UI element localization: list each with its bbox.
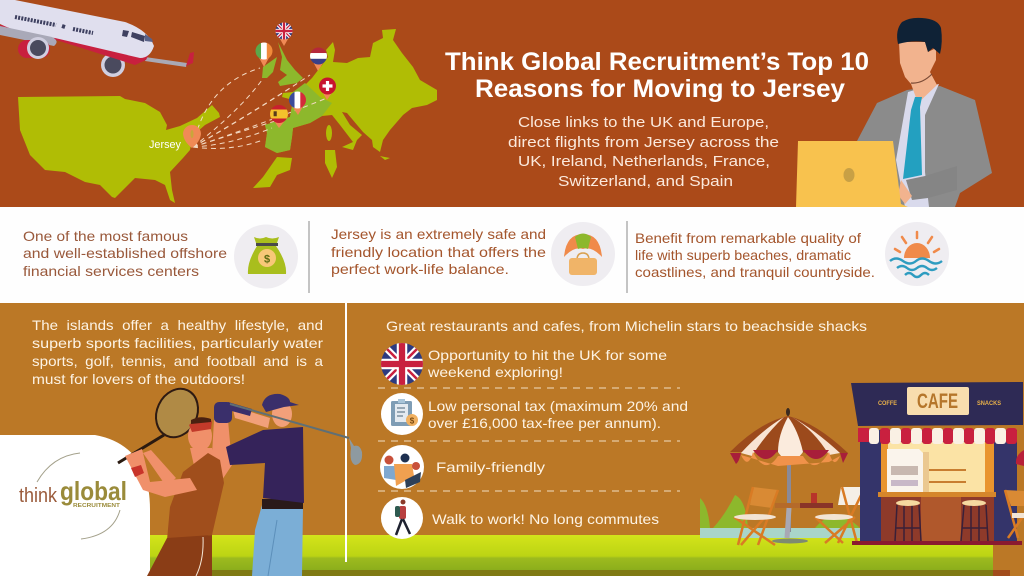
icon: family (380, 445, 424, 489)
icon: parasol and suitcase (551, 222, 615, 286)
illustration: far right chair (1005, 450, 1024, 538)
illustration: plane (0, 0, 194, 77)
panel: lower section background (0, 303, 1024, 576)
illustration: businessman with laptop (796, 18, 992, 207)
icon: sun over waves (885, 222, 949, 286)
pin: UK flag (276, 22, 292, 46)
text: flights intro: Switzerland, and Spain (558, 173, 733, 190)
icon: money bag (234, 224, 298, 288)
icon: money bag: $ (264, 254, 270, 266)
icon: tax document: $ (410, 416, 415, 426)
illustration: tennis player (118, 382, 232, 576)
text: quality of life (635, 230, 875, 280)
title: Think Global Recruitment’s Top 10 (445, 48, 869, 76)
map: USA (18, 96, 220, 203)
list item: UK weekend (381, 343, 667, 385)
pin: Spain flag (270, 105, 288, 128)
pin: France flag (289, 92, 306, 115)
illustration: right chair (815, 487, 865, 543)
text: flights intro: UK, Ireland, Netherlands, France, (518, 153, 770, 170)
pin: Switzerland flag (319, 78, 336, 100)
vertical divider: lower section (345, 303, 347, 562)
logo panel: think global recruitment (0, 435, 150, 576)
title: Reasons for Moving to Jersey (475, 75, 845, 103)
text: sports lifestyle: must for lovers of the outdoors! (32, 371, 245, 387)
panel: white benefits band background (0, 207, 1024, 303)
illustration: cafe kiosk: COFFE (878, 400, 898, 407)
illustration: cafe kiosk: SNACKS (977, 400, 1002, 407)
text: safe and friendly: perfect work-life balance. (331, 261, 509, 277)
pin: Jersey (183, 125, 201, 148)
logo panel: think global recruitment: RECRUITMENT (73, 503, 120, 509)
divider (626, 221, 628, 293)
text: financial services: and well-established offshore (23, 245, 227, 261)
text: financial services (23, 228, 227, 279)
pin: Netherlands flag (310, 48, 327, 71)
text: financial services: One of the most famous (23, 228, 188, 244)
list item: UK weekend: Opportunity to hit the UK for some (428, 347, 667, 363)
text: flights intro: Close links to the UK and Europe, (518, 114, 769, 131)
map: Europe (253, 29, 437, 188)
pin: Ireland flag (256, 42, 273, 67)
text: flights intro (508, 114, 779, 190)
text: sports lifestyle: The islands offer a healthy lifestyle, and (32, 317, 323, 333)
icon: walking commuter (381, 497, 423, 539)
text: quality of life: Benefit from remarkable quality of (635, 230, 861, 246)
list item: family friendly: Family-friendly (436, 459, 545, 475)
list item: family friendly (380, 445, 545, 489)
text: financial services: financial services centers (23, 263, 199, 279)
text: safe and friendly: Jersey is an extremely safe and (331, 226, 546, 242)
text: sports lifestyle (32, 317, 323, 387)
text: sports lifestyle: superb sports facilities, particularly water (32, 335, 323, 351)
text: sports lifestyle: sports, golf, tennis, and football and is a (32, 353, 323, 369)
list item: walk to work (381, 497, 659, 539)
list item: low tax (381, 393, 688, 435)
icon: tax document (381, 393, 423, 435)
illustration: umbrella and table (730, 408, 848, 544)
panel: top banner background (0, 0, 1024, 207)
text: restaurants heading: Great restaurants and cafes, from Michelin stars to beachside shacks (386, 318, 867, 334)
title (445, 48, 869, 103)
ground: grass (150, 535, 1010, 576)
text: quality of life: life with superb beaches, dramatic (635, 247, 851, 263)
text: quality of life: coastlines, and tranquil countryside. (635, 264, 875, 280)
illustration: golfer (214, 394, 362, 576)
text: safe and friendly (331, 226, 546, 277)
list item: walk to work: Walk to work! No long commutes (432, 511, 659, 527)
logo panel: think global recruitment: global (60, 476, 127, 506)
text: safe and friendly: friendly location that offers the (331, 244, 546, 260)
logo panel: think global recruitment: think (19, 485, 58, 507)
divider (308, 221, 310, 293)
icon: UK flag (381, 343, 423, 385)
illustration: cafe kiosk: CAFE (917, 390, 958, 413)
illustration: left chair (734, 487, 778, 545)
illustration: patio scenery (700, 495, 865, 538)
text: flights intro: direct flights from Jersey across the (508, 134, 779, 151)
route lines (193, 68, 327, 148)
list item: UK weekend: weekend exploring! (427, 364, 563, 380)
list item: low tax: Low personal tax (maximum 20% and (428, 398, 688, 414)
label: Jersey: Jersey (149, 139, 181, 151)
illustration: cafe kiosk (851, 382, 1023, 545)
list item: low tax: over £16,000 tax-free per annum). (428, 415, 661, 431)
